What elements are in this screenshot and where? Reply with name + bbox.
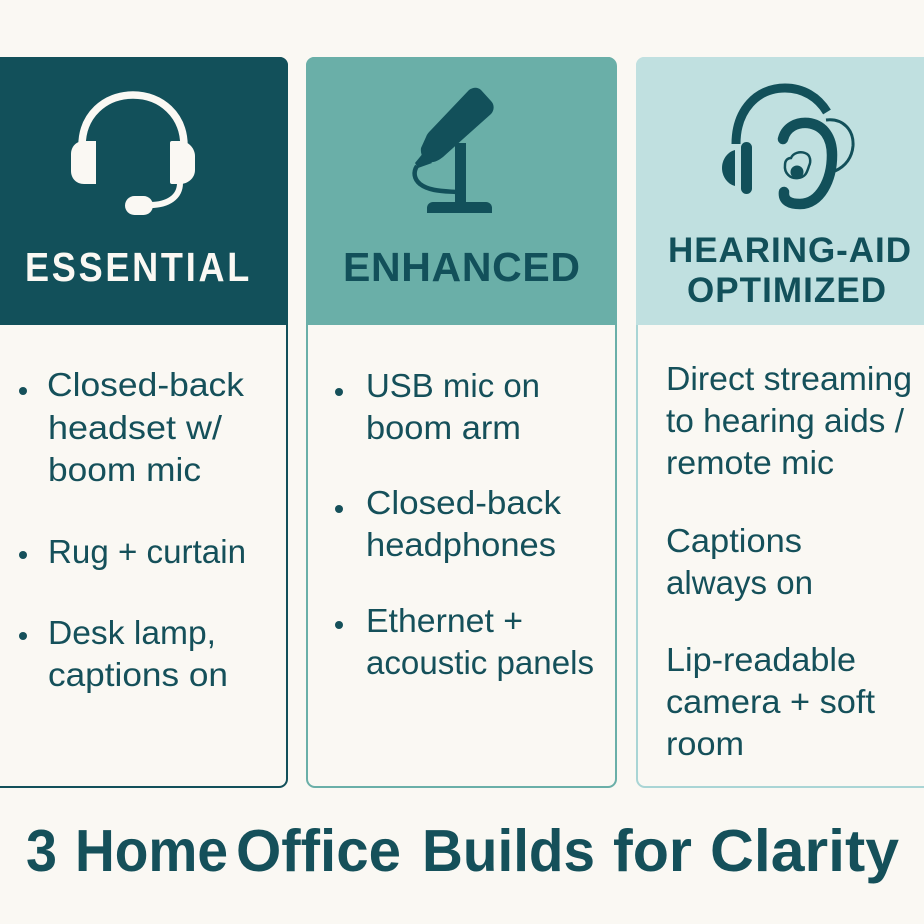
heading: hearing-aid optimized: OPTIMIZED [687,271,886,310]
title: Clarity [710,818,899,884]
list: hearing-aid optimized items: camera + soft [666,683,875,720]
card outline [307,58,616,787]
title: 3 [26,818,57,884]
list: essential items: Desk lamp, [48,614,216,651]
panel: essential [0,57,288,787]
list: essential items: Rug + curtain [48,533,246,570]
list: essential items: headset w/ [48,409,223,446]
list: essential items: boom mic [48,451,201,488]
list: hearing-aid optimized items: to hearing aids / [666,402,905,439]
heading: hearing-aid optimized [668,231,911,310]
list: essential items: Closed-back [47,366,245,403]
heading: essential: ESSENTIAL [25,245,252,291]
list: hearing-aid optimized items: Lip-readable [666,641,856,678]
heading: hearing-aid optimized: HEARING-AID [668,231,911,270]
list: hearing-aid optimized items: remote mic [666,444,834,481]
list: enhanced items: Closed-back [366,484,562,521]
list: enhanced items: headphones [366,526,556,563]
icon: headphones with ear and hearing aid [722,88,853,204]
list: essential items: captions on [48,656,228,693]
title: for [613,818,692,884]
card outline [637,58,924,787]
list: hearing-aid optimized items: Captions [666,522,802,559]
list: hearing-aid optimized items [666,360,912,762]
title [26,818,899,884]
list: enhanced items: Ethernet + [366,602,523,639]
list: hearing-aid optimized items: room [666,725,744,762]
list: enhanced items: boom arm [366,409,521,446]
panel: enhanced [306,57,616,787]
list: hearing-aid optimized items: Direct streaming [666,360,912,397]
title: Builds [422,818,595,884]
header band: essential [0,57,288,325]
list: hearing-aid optimized items: always on [666,564,813,601]
list: essential items [19,366,246,693]
header band: enhanced [306,57,616,325]
panel: hearing-aid optimized [636,57,924,787]
title: Home [75,818,228,884]
card outline [0,58,287,787]
icon: headset with boom mic [71,95,195,215]
heading: enhanced: ENHANCED [343,244,580,290]
list: enhanced items: acoustic panels [366,644,594,681]
icon: microphone on stand [415,88,494,213]
list: enhanced items: USB mic on [366,367,540,404]
header band: hearing-aid optimized [636,57,924,325]
list: enhanced items [335,367,594,681]
title: Office [236,818,401,884]
